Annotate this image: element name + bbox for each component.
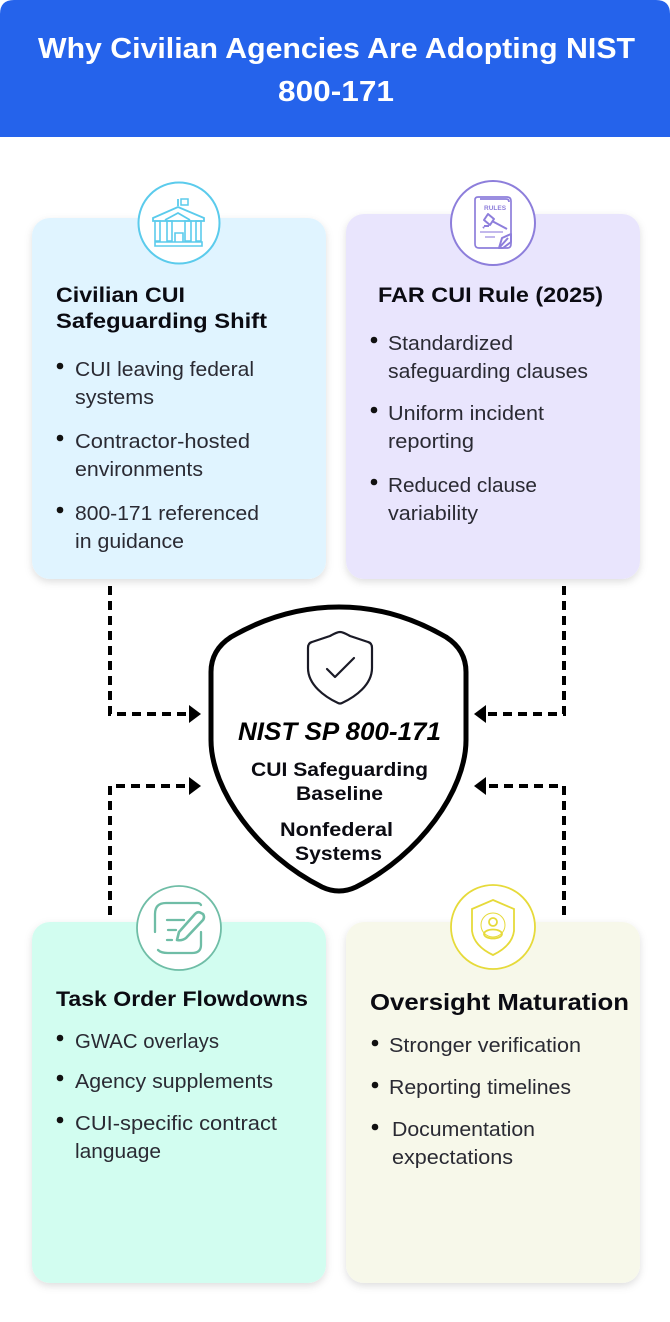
shield subtitle: Baseline xyxy=(296,784,383,805)
bullet list: environments xyxy=(75,459,203,481)
icon: shield check xyxy=(308,632,372,704)
bullet list: expectations xyxy=(392,1147,513,1169)
icon: shield with user xyxy=(451,885,535,969)
bullet list: Reporting timelines xyxy=(389,1077,571,1099)
central shield: NIST SP 800-171 xyxy=(211,607,466,891)
shield subtitle: Nonfederal xyxy=(280,820,393,841)
heading: Civilian CUI xyxy=(56,284,185,307)
shield title: NIST SP 800-171 xyxy=(238,718,441,746)
connector: top left to shield xyxy=(110,586,201,723)
bullet list: Contractor-hosted xyxy=(75,431,250,453)
icon: rule book and gavel xyxy=(451,181,535,265)
heading: FAR CUI Rule (2025) xyxy=(378,284,603,307)
heading: Safeguarding Shift xyxy=(56,310,267,333)
bullet list: variability xyxy=(388,503,478,525)
heading: Oversight Maturation xyxy=(370,989,629,1015)
shield subtitle xyxy=(251,760,428,865)
panel: FAR CUI Rule (2025) xyxy=(346,181,640,579)
bullet list: Uniform incident xyxy=(388,403,544,425)
title banner xyxy=(0,0,670,137)
bullet list xyxy=(372,1035,581,1169)
icon: government building xyxy=(138,182,220,264)
bullet list: 800-171 referenced xyxy=(75,503,259,525)
bullet list: GWAC overlays xyxy=(75,1031,219,1053)
bullet list: CUI leaving federal xyxy=(75,359,254,381)
bullet list: CUI-specific contract xyxy=(75,1113,277,1135)
bullet list xyxy=(57,1031,277,1163)
bullet list: language xyxy=(75,1141,161,1163)
shield subtitle: CUI Safeguarding xyxy=(251,760,428,781)
bullet list: reporting xyxy=(388,431,474,453)
bullet list: Reduced clause xyxy=(388,475,537,497)
panel: Civilian CUI Safeguarding Shift xyxy=(32,182,326,579)
title banner: Why Civilian Agencies Are Adopting NIST xyxy=(38,33,635,65)
heading: Task Order Flowdowns xyxy=(56,988,308,1011)
icon: note and pencil xyxy=(137,886,221,970)
bullet list: in guidance xyxy=(75,531,184,553)
title banner: 800-171 xyxy=(278,76,394,108)
connector: bottom right to shield xyxy=(474,777,564,915)
connector: bottom left to shield xyxy=(110,777,201,915)
bullet list xyxy=(57,359,259,553)
heading xyxy=(56,284,267,333)
bullet list: Standardized xyxy=(388,333,513,355)
bullet list: systems xyxy=(75,387,154,409)
panel: Task Order Flowdowns xyxy=(32,886,326,1283)
bullet list: Stronger verification xyxy=(389,1035,581,1057)
icon: rule book and gavel: RULES xyxy=(484,205,507,212)
panel: Oversight Maturation xyxy=(346,885,640,1283)
bullet list: Agency supplements xyxy=(75,1071,273,1093)
bullet list: Documentation xyxy=(392,1119,535,1141)
connector: top right to shield xyxy=(474,586,564,723)
bullet list: safeguarding clauses xyxy=(388,361,588,383)
bullet list xyxy=(371,333,588,525)
shield subtitle: Systems xyxy=(295,844,382,865)
